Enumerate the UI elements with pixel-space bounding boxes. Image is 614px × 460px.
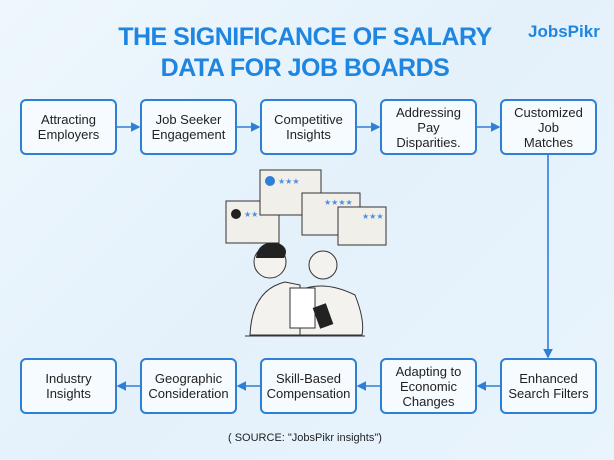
- box: Addressing Pay Disparities: Addressing: [396, 104, 461, 120]
- box: Addressing Pay Disparities: Pay: [417, 120, 440, 134]
- box: Job Seeker Engagement: [140, 99, 237, 155]
- box: Industry Insights: Insights: [46, 386, 91, 401]
- box: Attracting Employers: Employers: [38, 127, 99, 142]
- box: Competitive Insights: [260, 99, 357, 155]
- illustration: people with review cards: ★★★: [278, 177, 300, 186]
- box: Enhanced Search Filters: Enhanced: [519, 371, 578, 386]
- source: ( SOURCE: "JobsPikr insights"): [228, 432, 382, 444]
- box: Customized Job Matches: Customized: [514, 104, 583, 120]
- box: Job Seeker Engagement: Job Seeker: [156, 112, 221, 127]
- box: Customized Job Matches: Matches: [524, 134, 573, 150]
- box: Skill-Based Compensation: Compensation: [267, 386, 350, 401]
- box: Job Seeker Engagement: Engagement: [152, 127, 225, 142]
- title: [118, 23, 492, 82]
- box: Competitive Insights: Competitive: [274, 112, 343, 127]
- box: Geographic Consideration: Consideration: [148, 386, 229, 401]
- box: Industry Insights: [20, 358, 117, 414]
- box: Customized Job Matches: [500, 99, 597, 155]
- box: Competitive Insights: Insights: [286, 127, 331, 142]
- box: Geographic Consideration: [140, 358, 237, 414]
- box: Adapting to Economic Changes: [380, 358, 477, 414]
- box: Addressing Pay Disparities: Disparities.: [396, 134, 461, 150]
- title: DATA FOR JOB BOARDS: [161, 54, 449, 82]
- illustration: people with review cards: ★★: [244, 210, 258, 219]
- logo: JobsPikr: [528, 22, 600, 41]
- box: Addressing Pay Disparities: [380, 99, 477, 155]
- box: Skill-Based Compensation: [260, 358, 357, 414]
- box: Customized Job Matches: Job: [538, 120, 559, 134]
- box: Adapting to Economic Changes: Economic: [400, 378, 457, 394]
- box: Enhanced Search Filters: [500, 358, 597, 414]
- box: Industry Insights: Industry: [45, 371, 92, 386]
- box: Attracting Employers: Attracting: [41, 112, 96, 127]
- box: Attracting Employers: [20, 99, 117, 155]
- box: Geographic Consideration: Geographic: [155, 371, 222, 386]
- box: Adapting to Economic Changes: Changes: [402, 394, 455, 408]
- illustration: people with review cards: ★★★★: [324, 198, 353, 207]
- box: Adapting to Economic Changes: Adapting to: [396, 364, 461, 378]
- illustration: people with review cards: ★★★: [362, 212, 384, 221]
- box: Skill-Based Compensation: Skill-Based: [276, 371, 341, 386]
- title: THE SIGNIFICANCE OF SALARY: [118, 23, 492, 51]
- box: Enhanced Search Filters: Search Filters: [508, 386, 589, 401]
